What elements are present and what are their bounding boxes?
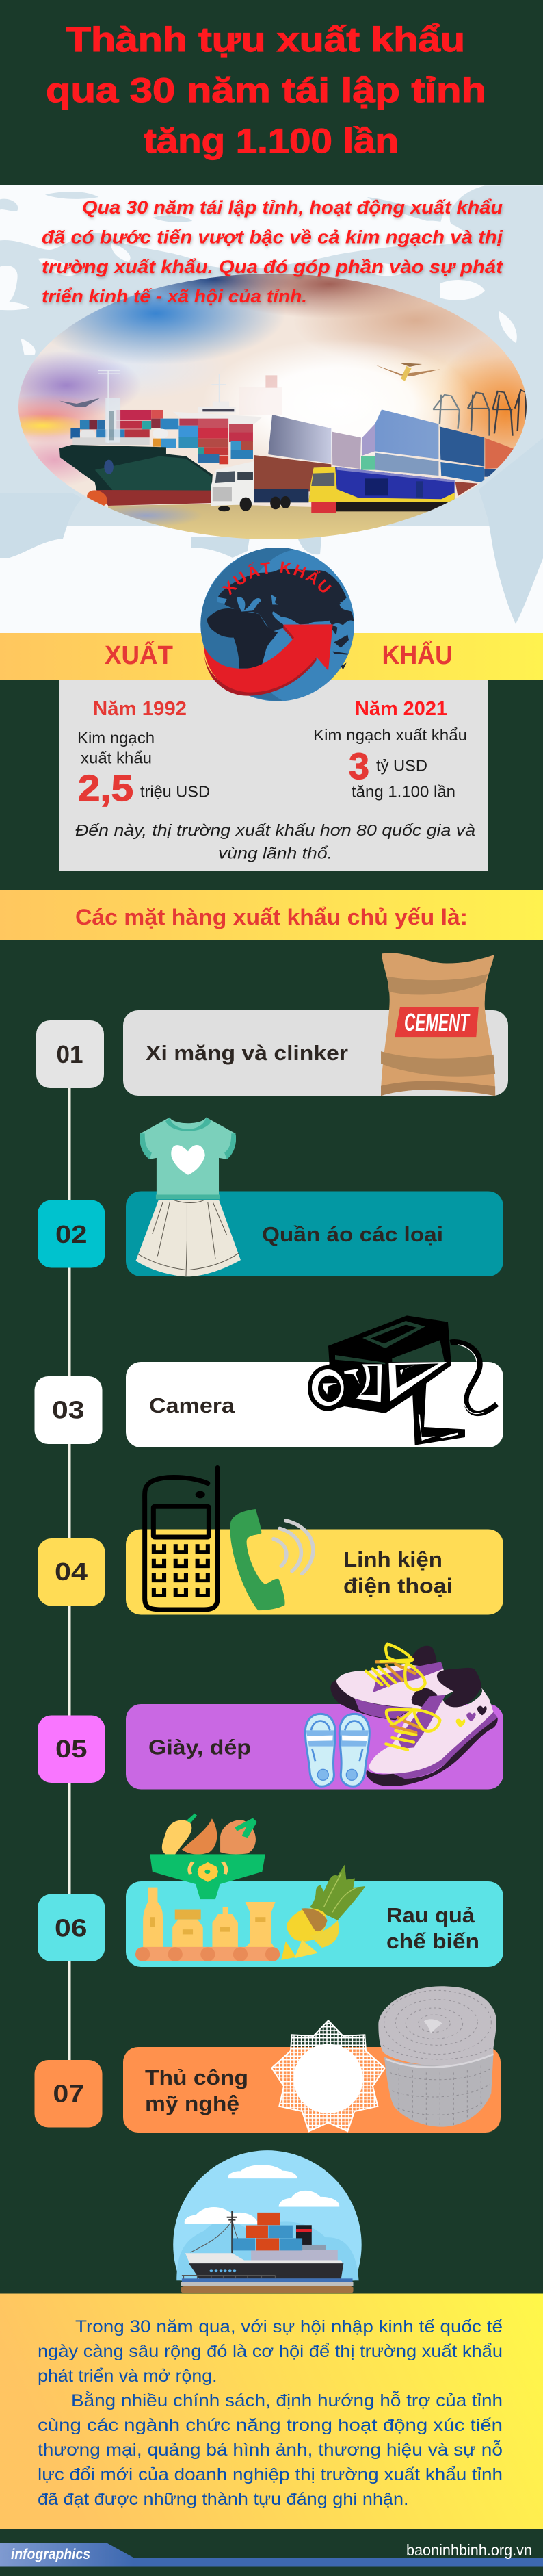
band: heading of export goods <box>0 890 543 940</box>
intro text: Qua 30 năm tái lập tỉnh, hoạt động xuất khẩu <box>82 197 503 218</box>
footer bar: infographics <box>11 2547 90 2562</box>
planes <box>374 363 440 381</box>
item 03: camera: 03 <box>52 1396 85 1424</box>
band: xuất khẩu: KHẨU <box>382 639 453 670</box>
panel: comparison 1992 vs 2021: tỷ USD <box>376 757 427 775</box>
item 02: clothes <box>38 1118 503 1276</box>
title: tăng 1.100 lần <box>144 122 399 160</box>
illustration: cargo ship in a dome <box>173 2150 362 2293</box>
train <box>308 467 455 502</box>
timeline line <box>68 1088 71 2060</box>
item 04: phone parts: điện thoại <box>343 1574 453 1597</box>
panel: comparison 1992 vs 2021: 2,5 <box>78 768 133 809</box>
panel: closing text: Trong 30 năm qua, với sự hội nhập kinh tế quốc tế <box>75 2317 503 2336</box>
icon: sneakers <box>330 1644 498 1786</box>
intro text: trường xuất khẩu. Qua đó góp phần vào sự phát <box>42 257 503 277</box>
title: Thành tựu xuất khẩu <box>66 21 465 59</box>
item 06: processed fruit and vegetables <box>38 1814 503 1967</box>
icon: lace doily <box>272 2020 385 2131</box>
panel: closing text: cùng các ngành chức năng trong hoạt động xúc tiến <box>38 2416 503 2435</box>
icon: woven basket <box>378 1986 496 2127</box>
item 07: handicrafts: 07 <box>53 2079 84 2108</box>
icon: mobile phone <box>145 1468 217 1610</box>
ground <box>108 504 451 541</box>
lower map patches <box>479 438 543 624</box>
mast <box>98 370 120 443</box>
icon: cement bag <box>381 953 495 1096</box>
item 05: footwear <box>38 1644 503 1789</box>
panel: comparison 1992 vs 2021 <box>59 680 488 871</box>
title <box>46 21 486 160</box>
item 01: cement <box>36 953 508 1096</box>
panel: comparison 1992 vs 2021: 3 <box>349 746 369 787</box>
item 03: camera <box>34 1315 503 1447</box>
icon: cement bag: CEMENT <box>404 1008 471 1036</box>
panel: comparison 1992 vs 2021: Kim ngạch <box>77 729 155 747</box>
band: heading of export goods: Các mặt hàng xuất khẩu chủ yếu là: <box>75 905 468 929</box>
item 01: cement: 01 <box>56 1040 83 1068</box>
panel: closing text: đã đạt được những thành tựu đáng ghi nhận. <box>38 2490 409 2509</box>
panel: comparison 1992 vs 2021: tăng 1.100 lần <box>352 783 455 801</box>
intro text: triển kinh tế - xã hội của tỉnh. <box>42 286 307 307</box>
cranes <box>433 390 526 436</box>
panel: closing text: lực đổi mới của doanh nghiệp thị trường xuất khẩu tỉnh <box>38 2465 503 2484</box>
footer bar: baoninhbinh.org.vn <box>406 2541 532 2559</box>
panel: comparison 1992 vs 2021: Năm 2021 <box>355 698 447 720</box>
item 04: phone parts: Linh kiện <box>343 1547 442 1571</box>
item 07: handicrafts <box>34 1986 501 2133</box>
panel: comparison 1992 vs 2021: Kim ngạch xuất khẩu <box>313 726 467 744</box>
band: xuất khẩu: XUẤT <box>105 640 173 670</box>
band: xuất khẩu <box>0 633 543 680</box>
item 02: clothes: 02 <box>55 1220 88 1248</box>
panel: comparison 1992 vs 2021: Đến này, thị trường xuất khẩu hơn 80 quốc gia và <box>75 821 475 839</box>
item 05: footwear: Giày, dép <box>148 1736 251 1759</box>
icon: globe with arrow: XUẤT KHẨU <box>222 561 332 595</box>
item 06: processed fruit and vegetables: 06 <box>55 1914 88 1942</box>
icon: green handset with waves <box>230 1509 313 1610</box>
panel: closing text <box>0 2294 543 2529</box>
panel: comparison 1992 vs 2021: xuất khẩu <box>81 749 152 767</box>
ghost ship <box>257 375 282 415</box>
title: qua 30 năm tái lập tỉnh <box>46 71 486 110</box>
item 07: handicrafts: mỹ nghệ <box>145 2091 239 2115</box>
item 03: camera: Camera <box>149 1393 235 1417</box>
panel: comparison 1992 vs 2021: vùng lãnh thổ. <box>218 845 332 862</box>
item 06: processed fruit and vegetables: chế biến <box>386 1929 479 1953</box>
big containers <box>268 415 331 463</box>
item 04: phone parts <box>38 1468 503 1615</box>
item 07: handicrafts: Thủ công <box>145 2065 248 2089</box>
intro text <box>42 197 503 307</box>
panel: closing text: phát triển và mở rộng. <box>38 2367 217 2386</box>
superstructure <box>173 402 263 426</box>
footer bar <box>0 2541 543 2566</box>
panel: comparison 1992 vs 2021: Năm 1992 <box>93 698 187 720</box>
truck <box>254 455 331 491</box>
ship hull <box>59 445 213 491</box>
icon: pineapple <box>281 1865 365 1960</box>
panel: world map background <box>0 185 543 633</box>
icon: globe with arrow <box>200 548 354 701</box>
item 05: footwear: 05 <box>55 1735 88 1763</box>
icon: shirt and shorts <box>136 1118 241 1276</box>
icon: fruit processing line <box>135 1814 280 1961</box>
item 04: phone parts: 04 <box>55 1558 88 1586</box>
panel: closing text: ngày càng sâu rộng đó là cơ hội để thị trường xuất khẩu <box>38 2342 503 2361</box>
panel: closing text: Bằng nhiều chính sách, định hướng hỗ trợ của tỉnh <box>71 2391 503 2410</box>
item 06: processed fruit and vegetables: Rau quả <box>386 1903 475 1927</box>
icon: sandals <box>305 1714 369 1786</box>
panel: comparison 1992 vs 2021: triệu USD <box>140 783 210 801</box>
containers <box>70 410 253 464</box>
item 02: clothes: Quần áo các loại <box>262 1222 443 1246</box>
photo: port with ship, containers, truck and train <box>18 274 527 539</box>
icon: security camera <box>308 1315 497 1445</box>
intro text: đã có bước tiến vượt bậc về cả kim ngạch và thị <box>42 227 503 248</box>
panel: closing text: thương mại, quảng bá hình ảnh, thương hiệu và sự nỗ <box>38 2440 503 2460</box>
item 01: cement: Xi măng và clinker <box>146 1041 348 1065</box>
